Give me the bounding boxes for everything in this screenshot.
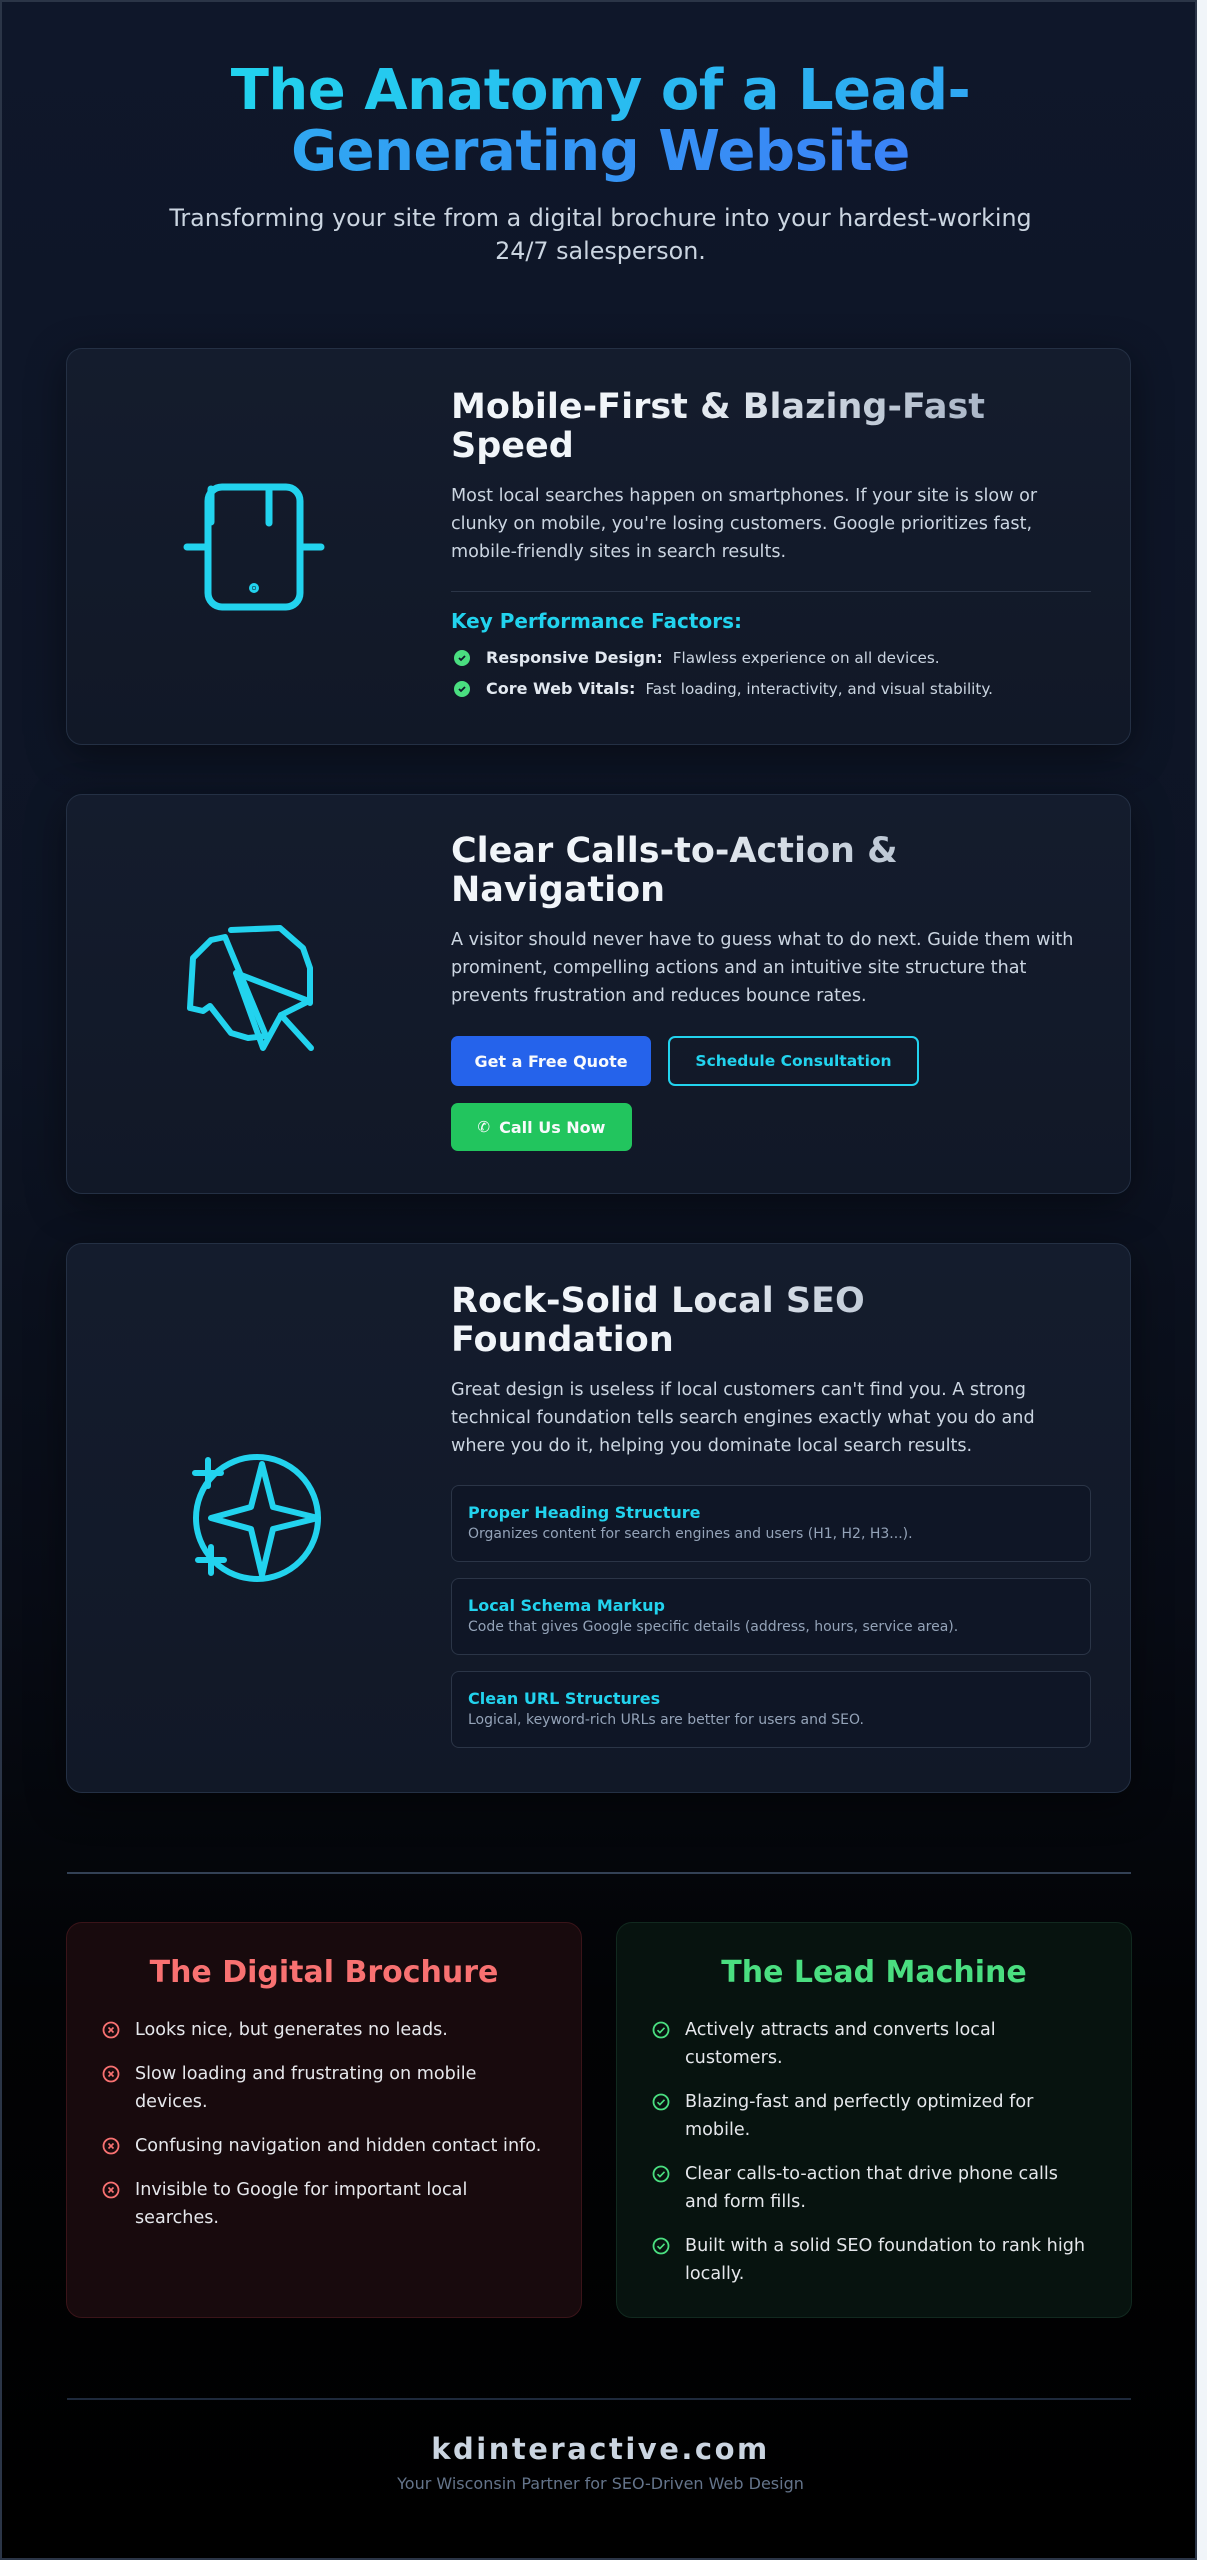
heading — [451, 1282, 1091, 1360]
factor: core web vitals: Fast loading, interactivity, and visual stability. — [645, 680, 993, 698]
factor: core web vitals — [454, 679, 993, 698]
factor: core web vitals: Core Web Vitals: — [486, 679, 635, 698]
heading: The Lead Machine — [721, 1955, 1027, 1990]
footer: tagline: Your Wisconsin Partner for SEO-Driven Web Design — [397, 2474, 804, 2493]
item: Looks nice, but generates no leads. — [135, 2020, 448, 2040]
item: heading structure — [451, 1485, 1091, 1562]
item: Built with a solid SEO foundation to rank high locally. — [685, 2236, 1085, 2284]
title: The Anatomy of a Lead- — [231, 58, 970, 123]
title — [231, 58, 970, 184]
icon: phone — [184, 484, 324, 610]
heading — [451, 832, 1091, 910]
button: get a free quote: Get a Free Quote — [474, 1052, 628, 1070]
item: clean URLs — [451, 1671, 1091, 1748]
panel: local SEO — [66, 1243, 1131, 1793]
button: schedule consultation — [668, 1036, 919, 1086]
title: Generating Website — [291, 119, 910, 184]
button: call us now: Call Us Now — [499, 1118, 605, 1136]
heading: Clear Calls-to-Action & Navigation — [451, 831, 898, 910]
icon: sparkle globe — [192, 1454, 321, 1582]
item: Actively attracts and converts local customers. — [685, 2020, 996, 2068]
panel: calls to action — [66, 794, 1131, 1194]
buttons — [451, 1036, 919, 1151]
subheading: Key Performance Factors: — [451, 609, 742, 633]
heading: The Digital Brochure — [150, 1955, 498, 1990]
factor: responsive: Flawless experience on all devices. — [673, 649, 940, 667]
factor: responsive — [454, 648, 940, 667]
button: get a free quote — [451, 1036, 651, 1086]
subtitle: Transforming your site from a digital brochure into your hardest-working 24/7 salesperson. — [169, 204, 1032, 265]
description: Great design is useless if local customers can't find you. A strong technical foundation tells search engines exactly what you do and where you do it, helping you dominate local search results. — [451, 1380, 1035, 1456]
icon: cursor click — [187, 925, 314, 1051]
panel: mobile-first speed — [66, 348, 1131, 745]
button: call us now: ✆ — [478, 1118, 490, 1136]
item: heading structure: Proper Heading Structure — [468, 1503, 700, 1522]
item: Invisible to Google for important local searches. — [135, 2180, 467, 2228]
heading: Mobile-First & Blazing-Fast Speed — [451, 387, 985, 466]
item: Clear calls-to-action that drive phone calls and form fills. — [685, 2164, 1058, 2212]
description: A visitor should never have to guess what to do next. Guide them with prominent, compelling actions and an intuitive site structure that prevents frustration and reduces bounce rates. — [451, 930, 1073, 1006]
item: heading structure: Organizes content for search engines and users (H1, H2, H3...). — [468, 1526, 913, 1542]
panel: lead machine — [616, 1922, 1132, 2318]
heading: Rock-Solid Local SEO Foundation — [451, 1281, 865, 1360]
item: schema markup: Code that gives Google specific details (address, hours, service area). — [468, 1619, 958, 1635]
item: clean URLs: Logical, keyword-rich URLs are better for users and SEO. — [468, 1712, 864, 1728]
footer: brand: kdinteractive.com — [431, 2432, 770, 2466]
item: schema markup: Local Schema Markup — [468, 1596, 665, 1615]
item: Slow loading and frustrating on mobile devices. — [135, 2064, 476, 2112]
panel: digital brochure — [66, 1922, 582, 2318]
button: call us now — [451, 1103, 632, 1151]
item: Blazing-fast and perfectly optimized for mobile. — [685, 2092, 1033, 2140]
description: Most local searches happen on smartphones. If your site is slow or clunky on mobile, you're losing customers. Google prioritizes fast, mobile-friendly sites in search results. — [451, 486, 1037, 562]
item: Confusing navigation and hidden contact info. — [135, 2136, 541, 2156]
button: schedule consultation: Schedule Consultation — [695, 1052, 892, 1070]
item: schema markup — [451, 1578, 1091, 1655]
item: clean URLs: Clean URL Structures — [468, 1689, 660, 1708]
factor: responsive: Responsive Design: — [486, 648, 663, 667]
